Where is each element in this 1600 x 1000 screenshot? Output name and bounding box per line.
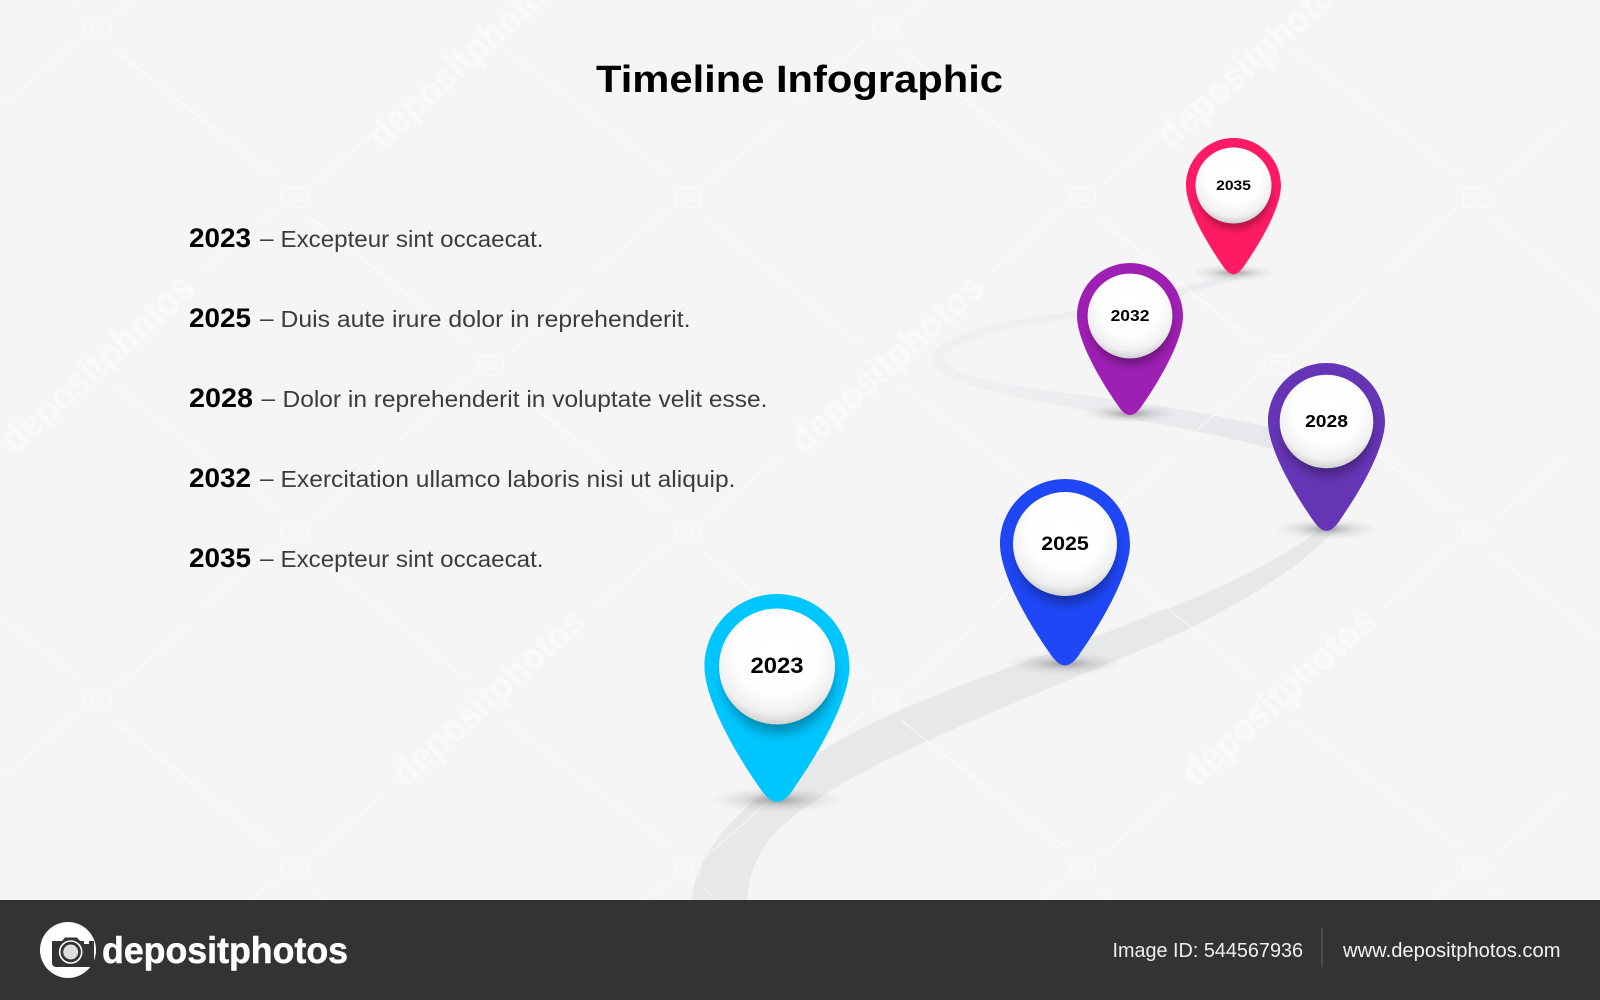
pin 2023: 2023 [750, 653, 804, 678]
pin 2028 [1268, 363, 1385, 540]
list item 2023 [189, 223, 544, 253]
website url: www.depositphotos.com [1342, 940, 1560, 962]
list item 2025 [189, 303, 690, 333]
list item 2025: – [260, 305, 274, 331]
list item 2035 [189, 543, 544, 573]
watermark overlay: depositphotos [782, 267, 992, 462]
list item 2028: 2028 [189, 383, 253, 413]
list item 2035: 2035 [189, 543, 251, 573]
timeline list [189, 223, 768, 573]
list item 2023: Excepteur sint occaecat. [280, 226, 544, 252]
list item 2023: 2023 [189, 223, 251, 253]
pin 2028: 2028 [1305, 411, 1348, 431]
watermark overlay: depositphotos [1174, 600, 1384, 795]
pin 2035: 2035 [1216, 178, 1251, 194]
pin 2032 [1077, 263, 1183, 423]
pin 2035 [1186, 138, 1281, 281]
footer bar [0, 900, 1600, 1000]
list item 2028: – [262, 385, 275, 411]
road: far section [932, 274, 1272, 449]
list item 2028 [189, 383, 768, 413]
watermark overlay: depositphotos [384, 600, 594, 795]
list item 2032: 2032 [189, 463, 251, 493]
pin 2032: 2032 [1111, 308, 1150, 325]
winding road [692, 274, 1340, 900]
brand name: depositphotos [102, 930, 348, 971]
list item 2025: Duis aute irure dolor in reprehenderit. [280, 306, 690, 332]
pin 2025 [1000, 479, 1130, 675]
list item 2032: – [260, 465, 274, 491]
image id: Image ID: 544567936 [1112, 940, 1303, 962]
list item 2035: – [260, 545, 274, 571]
list item 2035: Excepteur sint occaecat. [280, 546, 544, 572]
list item 2025: 2025 [189, 303, 251, 333]
pin 2023 [704, 594, 850, 813]
list item 2032 [189, 463, 736, 493]
list item 2028: Dolor in reprehenderit in voluptate velit esse. [282, 386, 768, 412]
list item 2032: Exercitation ullamco laboris nisi ut aliquip. [280, 466, 736, 492]
road: near section [692, 525, 1340, 900]
icon: camera logo [40, 922, 96, 978]
list item 2023: – [260, 225, 274, 251]
title: Timeline Infographic [596, 59, 1003, 101]
pin 2025: 2025 [1041, 533, 1089, 555]
